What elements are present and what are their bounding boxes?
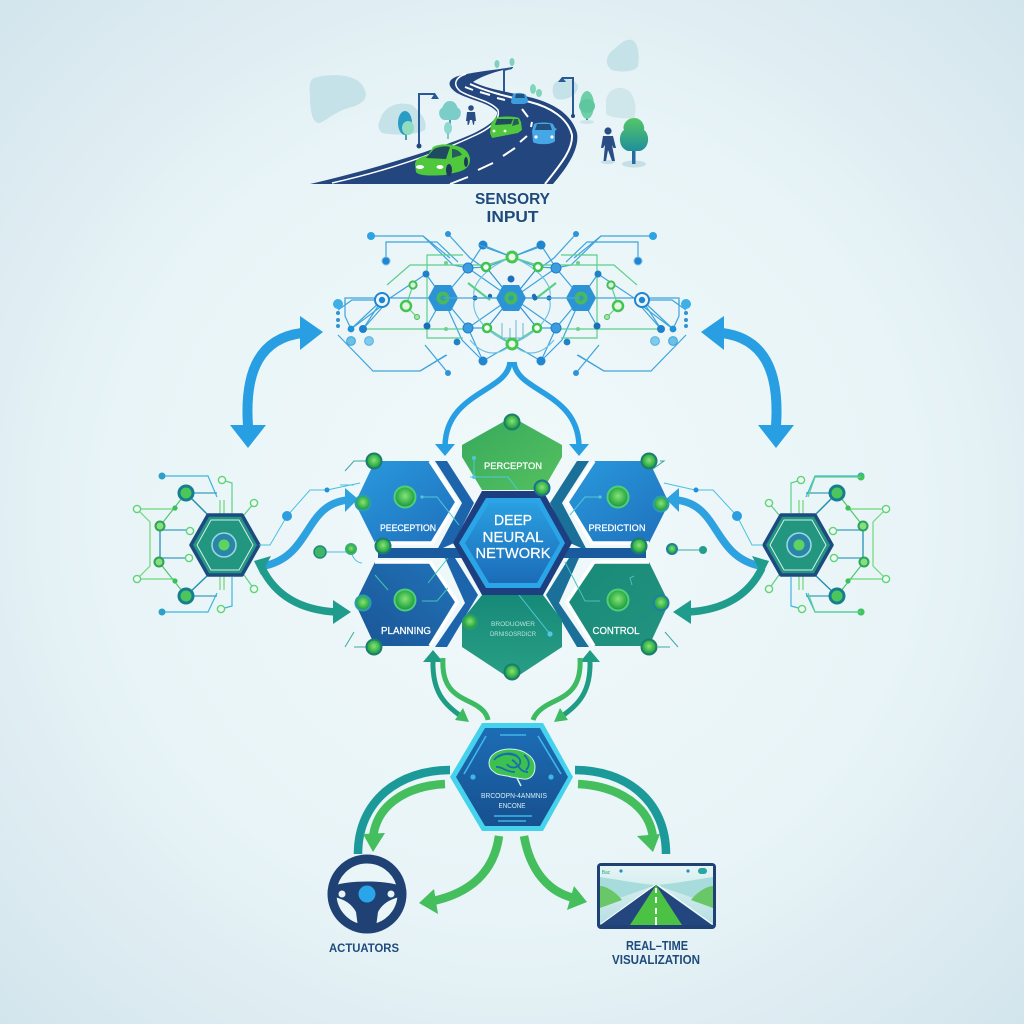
arrow: engine lower right — [524, 836, 587, 910]
hex: control right — [565, 562, 669, 646]
icon: visualization screen — [597, 863, 716, 929]
green nodes — [346, 414, 677, 680]
hex: planning left: PLANNING — [381, 626, 431, 637]
hex: deep neural network core: NEURAL — [482, 529, 544, 546]
hex: bottom teal: BRODUOWER — [491, 621, 535, 628]
arrow: engine lower left — [419, 836, 499, 914]
car: large green — [415, 144, 470, 176]
trees — [398, 58, 648, 168]
label: actuators: ACTUATORS — [329, 941, 399, 955]
hex: perception top — [462, 417, 562, 490]
hex: perception left — [355, 461, 459, 543]
car: far blue — [511, 93, 528, 104]
lamp posts — [419, 68, 573, 146]
arrow: left teal curve — [254, 556, 351, 624]
label: sensory input: SENSORY — [475, 191, 550, 208]
road — [310, 67, 577, 184]
panel: right side module — [764, 472, 890, 616]
car: blue — [532, 122, 557, 144]
arrow: engine to visualization teal — [575, 770, 666, 854]
label: real-time visualization: REAL–TIME — [626, 939, 688, 953]
panel: engine hexagon: BRCOOPN-4ANMNIS — [481, 793, 547, 800]
label: sensory input: INPUT — [486, 209, 539, 226]
arrow: top right double-headed — [701, 316, 794, 448]
chevron bands — [378, 461, 646, 647]
panel: engine hexagon: ENCONE — [498, 803, 526, 810]
hex: bottom teal: DRNISOSRDICR — [490, 631, 536, 638]
hex: deep neural network core — [453, 491, 572, 595]
hex: prediction right: PREDICTION — [588, 523, 646, 534]
road markings — [332, 74, 572, 184]
arrow: left blue S-curve — [264, 488, 358, 566]
hex: control right: CONTROL — [592, 626, 640, 637]
hex: bottom teal — [462, 595, 562, 680]
connector lines: right wires — [650, 461, 763, 647]
arrows: cluster to engine left — [423, 650, 488, 722]
hex: perception left: PEECEPTION — [380, 523, 436, 534]
label: real-time visualization — [612, 939, 700, 967]
left half of circuit — [333, 231, 545, 376]
scenery blobs — [310, 40, 639, 135]
icon: brain — [489, 749, 535, 786]
connector lines: left wires — [259, 461, 366, 647]
hex: perception top: PERCEPTON — [484, 461, 542, 472]
arrow: right blue S-curve — [666, 488, 760, 566]
arrow: right teal curve — [673, 556, 769, 624]
hex: deep neural network core: NETWORK — [476, 545, 550, 562]
label: real-time visualization: VISUALIZATION — [612, 953, 700, 967]
circuit centre node — [443, 252, 580, 349]
hex: prediction right — [567, 461, 669, 543]
panel: hexagon cluster — [346, 414, 677, 680]
arrow: engine to actuators green — [363, 784, 445, 852]
icon: visualization screen: Bac — [602, 870, 611, 876]
large ringed nodes — [394, 486, 628, 610]
arrow: centre split left — [435, 362, 510, 456]
panel: left side module — [133, 472, 259, 616]
right half of circuit — [479, 231, 691, 376]
arrow: engine to actuators teal — [358, 770, 450, 854]
arrows: cluster to engine right — [533, 650, 600, 722]
arrow: top left double-headed — [230, 316, 323, 448]
icon: steering wheel — [332, 859, 402, 929]
hex: deep neural network core: DEEP — [494, 512, 532, 529]
pedestrians — [466, 105, 616, 164]
neural network circuit diagram — [333, 231, 691, 376]
hex: planning left — [355, 558, 457, 646]
label: sensory input — [475, 191, 550, 226]
arrow: centre split right — [514, 362, 589, 456]
car: mid green — [490, 116, 522, 138]
arrow: engine to visualization green — [578, 784, 660, 852]
panel: engine hexagon — [450, 723, 573, 831]
panel: sensory input road scene — [310, 40, 648, 226]
